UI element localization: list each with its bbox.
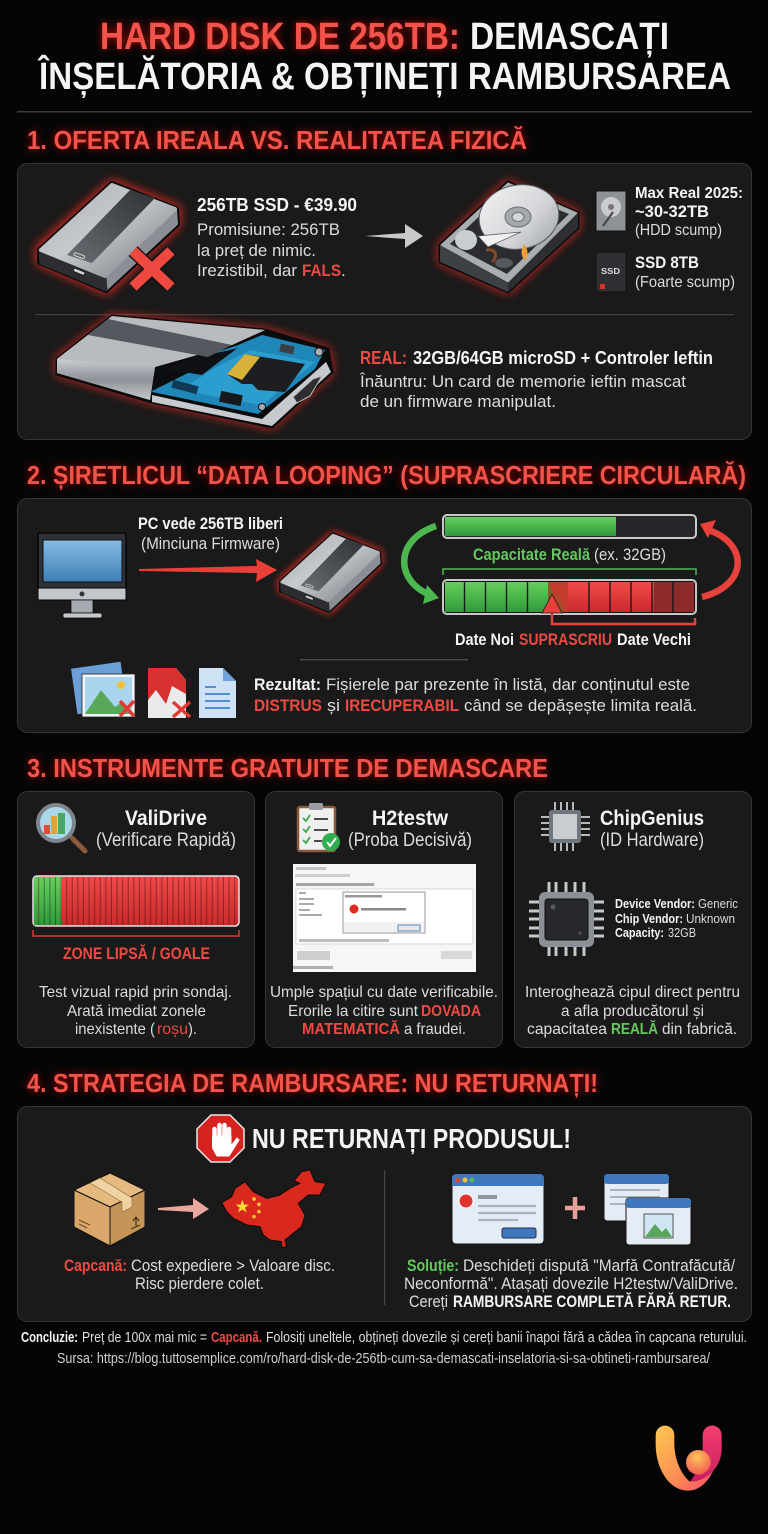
text: chip details: Capacity:	[615, 925, 664, 940]
text: ValiDrive description: ).	[188, 1021, 197, 1038]
arrow: offer to HDD	[365, 224, 423, 248]
text: ValiDrive description: inexistente (	[75, 1021, 156, 1038]
panel: data looping	[18, 498, 752, 732]
sub-element: error dialog	[343, 892, 425, 933]
text: real contents: REAL:	[360, 348, 407, 368]
text: result: și	[327, 696, 340, 715]
text: chip details: Device Vendor:	[615, 896, 695, 911]
text: real contents	[359, 348, 713, 411]
icon: small SSD	[596, 252, 626, 292]
text: new data overwrites old: Date Vechi	[617, 630, 691, 649]
text: fake offer: 256TB SSD - €39.90	[197, 195, 357, 215]
text: new data overwrites old	[455, 630, 691, 649]
text: ChipGenius description	[525, 984, 740, 1038]
text: real contents: Înăuntru: Un card de memorie ieftin mascat	[359, 372, 686, 391]
text: real contents: 32GB/64GB microSD + Controler Ieftin	[413, 348, 713, 368]
text: trap: Capcană:	[64, 1256, 127, 1275]
text: fake offer: .	[341, 261, 346, 280]
title: HARD DISK DE 256TB:	[100, 16, 460, 58]
text: SSD max capacity: SSD 8TB	[635, 253, 699, 272]
bar: overwritten segments	[443, 580, 696, 614]
text: HDD max capacity: ~30-32TB	[635, 202, 709, 221]
text: ChipGenius description: REALĂ	[611, 1019, 658, 1038]
text: H2testw title	[348, 807, 472, 851]
text: H2testw description	[270, 984, 498, 1038]
icon: SSD	[280, 533, 381, 612]
text: trap	[64, 1256, 335, 1293]
text: result: Rezultat:	[254, 675, 321, 694]
text: real capacity label: (ex. 32GB)	[594, 545, 666, 564]
text: ValiDrive description: Test vizual rapid prin sondaj.	[39, 984, 232, 1001]
text: result: IRECUPERABIL	[345, 696, 459, 715]
icon: hard disk	[440, 179, 578, 292]
text: H2testw title: H2testw	[372, 807, 449, 830]
text: H2testw description: MATEMATICĂ	[302, 1019, 400, 1038]
text: fake offer: la preț de nimic.	[197, 241, 316, 260]
text: solution: Deschideți dispută "Marfă Contrafăcută/	[463, 1256, 735, 1275]
text: ValiDrive description: roșu	[157, 1021, 188, 1038]
text: H2testw description: DOVADA	[421, 1003, 481, 1020]
icon: dispute window	[452, 1174, 544, 1244]
icon: opened fake drive	[57, 316, 332, 427]
sub-element: gold contacts	[227, 354, 260, 380]
icon: magnifier	[38, 805, 85, 851]
icon: big chip	[529, 882, 604, 956]
text: conclusion: Capcană.	[211, 1330, 262, 1346]
text: fake offer: Promisiune: 256TB	[197, 220, 340, 239]
icon: monitor	[38, 533, 126, 618]
text: real contents: de un firmware manipulat.	[360, 392, 556, 411]
text: result: Fișierele par prezente în listă, dar conținutul este	[326, 675, 690, 694]
text: fake offer: Irezistibil, dar	[197, 261, 297, 280]
text: HDD max capacity: (HDD scump)	[635, 222, 722, 239]
logo	[656, 1425, 722, 1491]
text: fake offer: FALS	[302, 261, 341, 280]
text: ChipGenius description: din fabrică.	[662, 1021, 737, 1038]
text: HDD max capacity	[635, 185, 743, 239]
text: ValiDrive title: ValiDrive	[125, 807, 207, 830]
title	[37, 16, 731, 98]
text: ChipGenius title: ChipGenius	[600, 807, 704, 830]
text: ValiDrive title: (Verificare Rapidă)	[96, 830, 236, 851]
text: solution: Soluție:	[407, 1256, 459, 1275]
icon: cardboard box	[74, 1173, 145, 1246]
text: SSD max capacity	[635, 253, 735, 291]
text: conclusion	[21, 1330, 747, 1346]
icon: damaged photos	[71, 662, 135, 717]
icon: corrupted file	[148, 668, 190, 718]
text: ChipGenius description: Interoghează cipul direct pentru	[525, 984, 740, 1001]
bar: real capacity	[443, 515, 696, 538]
text: solution: Neconformă". Atașați dovezile H2testw/ValiDrive.	[404, 1274, 738, 1293]
heading: section 1: 1. OFERTA IREALA VS. REALITATEA FIZICĂ	[27, 125, 527, 155]
text: H2testw description: Umple spațiul cu date verificabile.	[270, 984, 498, 1001]
screenshot: H2testw error window	[293, 864, 476, 972]
text: ChipGenius title	[600, 807, 704, 851]
text: chip details: Unknown	[686, 911, 735, 926]
text: PC sees 256TB: PC vede 256TB liberi	[138, 514, 283, 533]
text: chip details: 32GB	[668, 925, 696, 940]
text: conclusion: Preț de 100x mai mic =	[82, 1330, 207, 1346]
panel: ChipGenius	[514, 792, 752, 1048]
text: do not return: NU RETURNAȚI PRODUSUL!	[252, 1123, 571, 1154]
bar: ValiDrive map	[33, 876, 239, 926]
text: chip details: Generic	[698, 896, 738, 911]
text: new data overwrites old: Date Noi	[455, 630, 514, 649]
text: PC sees 256TB	[138, 514, 283, 553]
icon: stop hand	[197, 1115, 244, 1162]
arrow: overwrite	[542, 594, 695, 624]
text: PC sees 256TB: (Minciuna Firmware)	[141, 534, 280, 553]
panel: H2testw	[266, 792, 502, 1048]
text: SSD max capacity: (Foarte scump)	[635, 274, 735, 291]
arrow: red loop	[700, 520, 738, 597]
icon: small SSD: SSD	[601, 267, 620, 276]
text: new data overwrites old: SUPRASCRIU	[519, 630, 612, 649]
icon: China map	[222, 1170, 326, 1247]
text: result: DISTRUS	[254, 696, 322, 715]
text: missing zones: ZONE LIPSĂ / GOALE	[63, 944, 210, 963]
text: H2testw title: (Proba Decisivă)	[348, 830, 472, 851]
text: fake offer	[197, 195, 357, 280]
bracket: missing zones	[33, 930, 239, 936]
heading: section 3: 3. INSTRUMENTE GRATUITE DE DEMASCARE	[27, 753, 548, 783]
text: ValiDrive description	[39, 984, 232, 1038]
text: ChipGenius description: a afla producătorul și	[561, 1003, 704, 1020]
icon: document	[199, 668, 236, 718]
panel: offer vs reality	[18, 164, 752, 440]
text: trap: Risc pierdere colet.	[135, 1274, 264, 1293]
text: ValiDrive title	[96, 807, 236, 851]
icon: fake SSD with red X	[38, 182, 178, 292]
title: DEMASCAȚI	[470, 16, 669, 58]
panel: refund strategy	[18, 1106, 752, 1322]
icon: small chip	[541, 802, 590, 851]
text: HDD max capacity: Max Real 2025:	[635, 185, 743, 202]
text: chip details: Chip Vendor:	[615, 911, 683, 926]
text: ChipGenius title: (ID Hardware)	[600, 830, 704, 851]
text: trap: Cost expediere > Valoare disc.	[131, 1256, 335, 1275]
text: ChipGenius description: capacitatea	[527, 1021, 607, 1038]
text: ValiDrive description: Arată imediat zonele	[67, 1003, 206, 1020]
arrow: green loop	[404, 526, 439, 604]
text: H2testw description: a fraudei.	[404, 1021, 466, 1038]
text: result: când se depășește limita reală.	[464, 696, 697, 715]
text: real capacity label: Capacitate Reală	[473, 545, 590, 564]
icon: plus	[565, 1197, 585, 1219]
icon: small HDD	[596, 191, 626, 231]
text: solution: Cereți	[409, 1292, 448, 1311]
sub-element: microSD card	[227, 354, 305, 392]
heading: section 4: 4. STRATEGIA DE RAMBURSARE: NU RETURNAȚI!	[27, 1068, 598, 1098]
bracket: green	[443, 569, 696, 575]
arrow: PC to drive	[139, 559, 277, 582]
text: result	[254, 675, 697, 715]
text: chip details	[615, 896, 738, 940]
arrow: shipping to China	[158, 1198, 209, 1219]
text: solution	[404, 1256, 738, 1311]
text: conclusion: Concluzie:	[21, 1330, 78, 1346]
icon: evidence windows	[604, 1174, 691, 1245]
panel: ValiDrive	[18, 792, 254, 1048]
icon: clipboard	[298, 803, 340, 851]
text: H2testw description: Erorile la citire sunt	[288, 1003, 419, 1020]
